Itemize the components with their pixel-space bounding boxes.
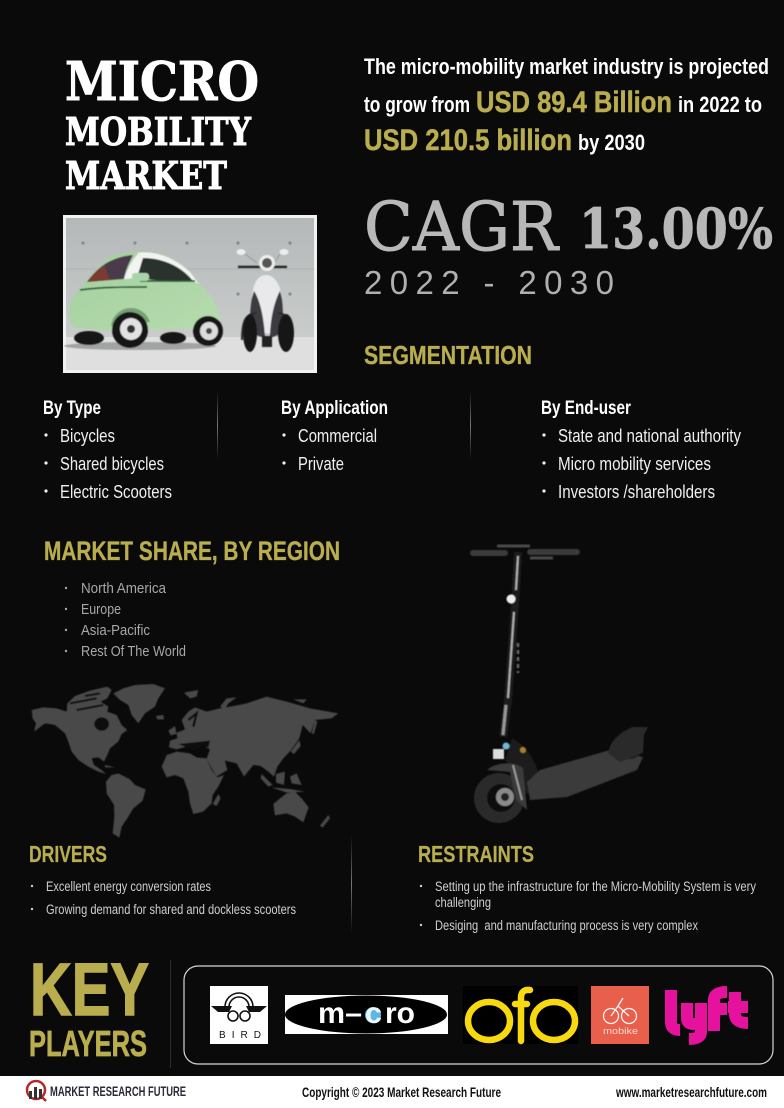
title: MARKET: [65, 153, 227, 198]
heading: segmentation: SEGMENTATION: [364, 340, 532, 370]
segment: by end-user: State and national authority: [558, 426, 741, 446]
restraints list: challenging: [435, 895, 491, 910]
region list: North America: [81, 580, 167, 597]
logo: mobike: mobike: [603, 1026, 638, 1037]
segment: by application: Private: [298, 454, 344, 474]
segment: by type: Bicycles: [60, 426, 115, 446]
electric scooter photo: [473, 546, 648, 823]
segment: by type: By Type: [43, 397, 101, 419]
segment: by end-user: [541, 397, 741, 502]
drivers list: Excellent energy conversion rates: [46, 879, 211, 894]
restraints list: [420, 879, 756, 933]
region list: Europe: [81, 601, 121, 618]
scooter: [236, 249, 294, 352]
drivers list: [31, 879, 296, 917]
segment: by end-user: Investors /shareholders: [558, 482, 715, 502]
region list: Rest Of The World: [81, 643, 186, 660]
segmentation dividers: [217, 390, 471, 460]
region list: [65, 580, 186, 660]
title: [65, 51, 259, 198]
logo: bird: BIRD: [219, 1030, 261, 1041]
region list: Asia-Pacific: [81, 622, 150, 639]
segment: by application: [281, 397, 388, 474]
logo: bird: [210, 986, 268, 1044]
segment: by end-user: By End-user: [541, 397, 631, 419]
key players heading: PLAYERS: [29, 1023, 147, 1064]
CAGR figure: [364, 188, 773, 266]
logo: micro: ro: [385, 997, 415, 1030]
segment: by end-user: Micro mobility services: [558, 454, 711, 474]
market projection text: to grow from: [364, 92, 470, 117]
logo: micro: c: [365, 997, 382, 1030]
footer copyright: Copyright © 2023 Market Research Future: [302, 1085, 501, 1100]
footer brand: MARKET RESEARCH FUTURE: [50, 1084, 186, 1099]
logo: micro: m–: [318, 997, 362, 1030]
segment: by type: Shared bicycles: [60, 454, 164, 474]
key players divider: [170, 960, 171, 1068]
segment: by application: By Application: [281, 397, 388, 419]
car: [64, 252, 223, 350]
key players heading: [29, 948, 149, 1064]
market projection text: USD 89.4 Billion: [476, 86, 672, 119]
logo: ofo: [463, 986, 578, 1044]
segment: by type: Electric Scooters: [60, 482, 172, 502]
CAGR figure: CAGR: [364, 188, 560, 266]
drivers list: Growing demand for shared and dockless scooters: [46, 902, 296, 917]
forecast period: 2022 - 2030: [364, 264, 614, 301]
product photo: micro car and scooter: [63, 215, 317, 373]
heading: restraints: RESTRAINTS: [418, 841, 534, 867]
title: MICRO: [65, 51, 259, 113]
segment: by application: Commercial: [298, 426, 377, 446]
logo: lyft: [671, 990, 748, 1039]
market projection text: [364, 54, 769, 157]
logo: mobike: [591, 986, 649, 1044]
footer logo: [27, 1081, 46, 1101]
footer bar: [0, 1076, 784, 1108]
market projection text: in 2022 to: [678, 92, 762, 117]
key players heading: KEY: [30, 948, 149, 1031]
heading: drivers: DRIVERS: [29, 841, 107, 867]
segment: by type: [43, 397, 172, 502]
market projection text: by 2030: [578, 130, 645, 155]
panel: key player logos: [184, 966, 773, 1064]
title: MOBILITY: [65, 109, 252, 154]
heading: market share by region: MARKET SHARE, BY REGION: [44, 536, 340, 566]
divider: [351, 835, 352, 933]
logo: micro: [285, 995, 448, 1034]
market projection text: USD 210.5 billion: [364, 124, 572, 157]
restraints list: Desiging and manufacturing process is very complex: [435, 918, 698, 933]
world map: [32, 684, 338, 838]
